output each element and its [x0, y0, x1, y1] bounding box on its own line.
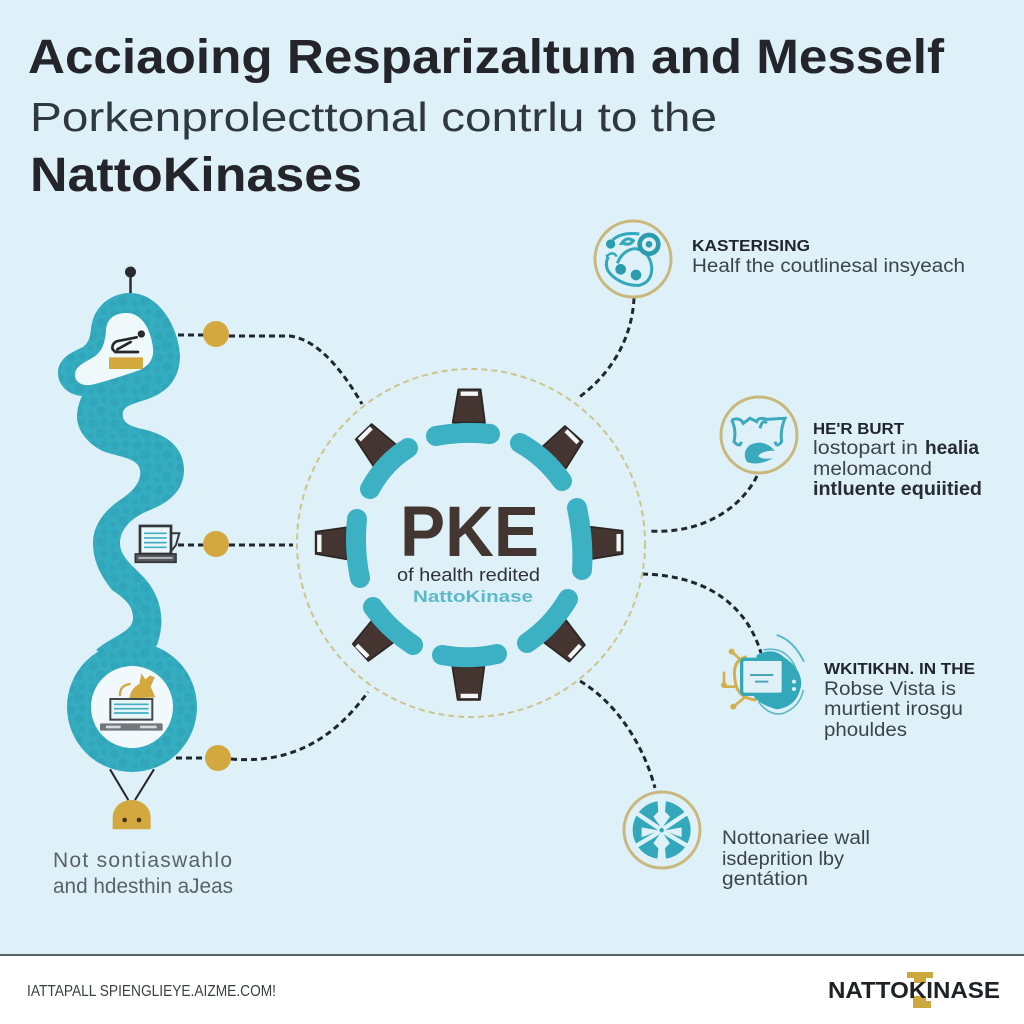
item 2 text: HE'R BURT — [813, 421, 904, 438]
serpentine body diagram — [58, 266, 185, 829]
item 2 text — [813, 421, 982, 500]
item 1 text: KASTERISING — [692, 238, 810, 255]
logo wordmark: NATTOKINASE — [828, 977, 1000, 1003]
item 2 text: healia — [925, 438, 979, 459]
ring at base of body — [79, 654, 185, 760]
gold node 2 — [203, 531, 229, 557]
item 4 text — [722, 828, 870, 890]
title block — [28, 31, 945, 202]
title line 2: Porkenprolecttonal contrlu to the — [30, 94, 717, 140]
icon: swirl — [721, 397, 797, 473]
item 3 text — [824, 661, 975, 741]
item 3 text: WKITIKHN. IN THE — [824, 661, 975, 678]
hub sublabel: of health redited — [397, 565, 540, 585]
serpentine body — [58, 293, 184, 670]
icon: tool in head — [109, 330, 145, 369]
left caption — [53, 849, 233, 898]
central hub — [297, 369, 645, 717]
item 1 text — [692, 238, 965, 277]
dashed connector lines — [176, 298, 761, 788]
hub connectors — [316, 389, 623, 700]
item 3 text: Robse Vista is — [824, 679, 956, 700]
item 2 — [721, 397, 982, 500]
item 2 text: lostopart in — [813, 438, 918, 459]
item 3 — [721, 635, 975, 741]
title line 3: NattoKinases — [30, 149, 362, 202]
item 2 text: intluente equiitied — [813, 479, 982, 500]
hub arc segments — [356, 433, 582, 657]
item 4 text: gentátion — [722, 869, 808, 890]
item 1 text: Healf the coutlinesal insyeach — [692, 256, 965, 277]
left caption: and hdesthin aJeas — [53, 875, 233, 898]
item 4 text: Nottonariee wall — [722, 828, 870, 849]
left caption: Not sontiaswahlo — [53, 849, 232, 872]
title line 1: Acciaoing Resparizaltum and Mesself — [28, 31, 945, 84]
hub teal label: NattoKinase — [413, 587, 533, 606]
hub label PKE: PKE — [400, 493, 539, 572]
icon: document device — [135, 526, 179, 562]
logo gold frame — [907, 972, 933, 1008]
item 3 text: phouldes — [824, 720, 907, 741]
item 3 text: murtient irosgu — [824, 699, 963, 720]
item 4 — [624, 792, 870, 890]
hanging gold pod — [110, 769, 154, 829]
icon: radial flower — [624, 792, 700, 868]
icon: monitor with orbit — [721, 635, 804, 714]
footer logo — [828, 972, 1000, 1008]
dashed hub outline — [297, 369, 645, 717]
item 2 text: melomacond — [813, 459, 932, 480]
icon: laptop with cat — [100, 673, 163, 731]
footer url: IATTAPALL SPIENGLIEYE.AIZME.COM! — [27, 983, 276, 1000]
icon: cells — [595, 221, 671, 297]
item 1 — [595, 221, 965, 297]
item 4 text: isdeprition lby — [722, 849, 845, 870]
antenna — [125, 266, 136, 294]
gold node 3 — [205, 745, 231, 771]
head opening — [75, 313, 153, 385]
gold node 1 — [203, 321, 229, 347]
